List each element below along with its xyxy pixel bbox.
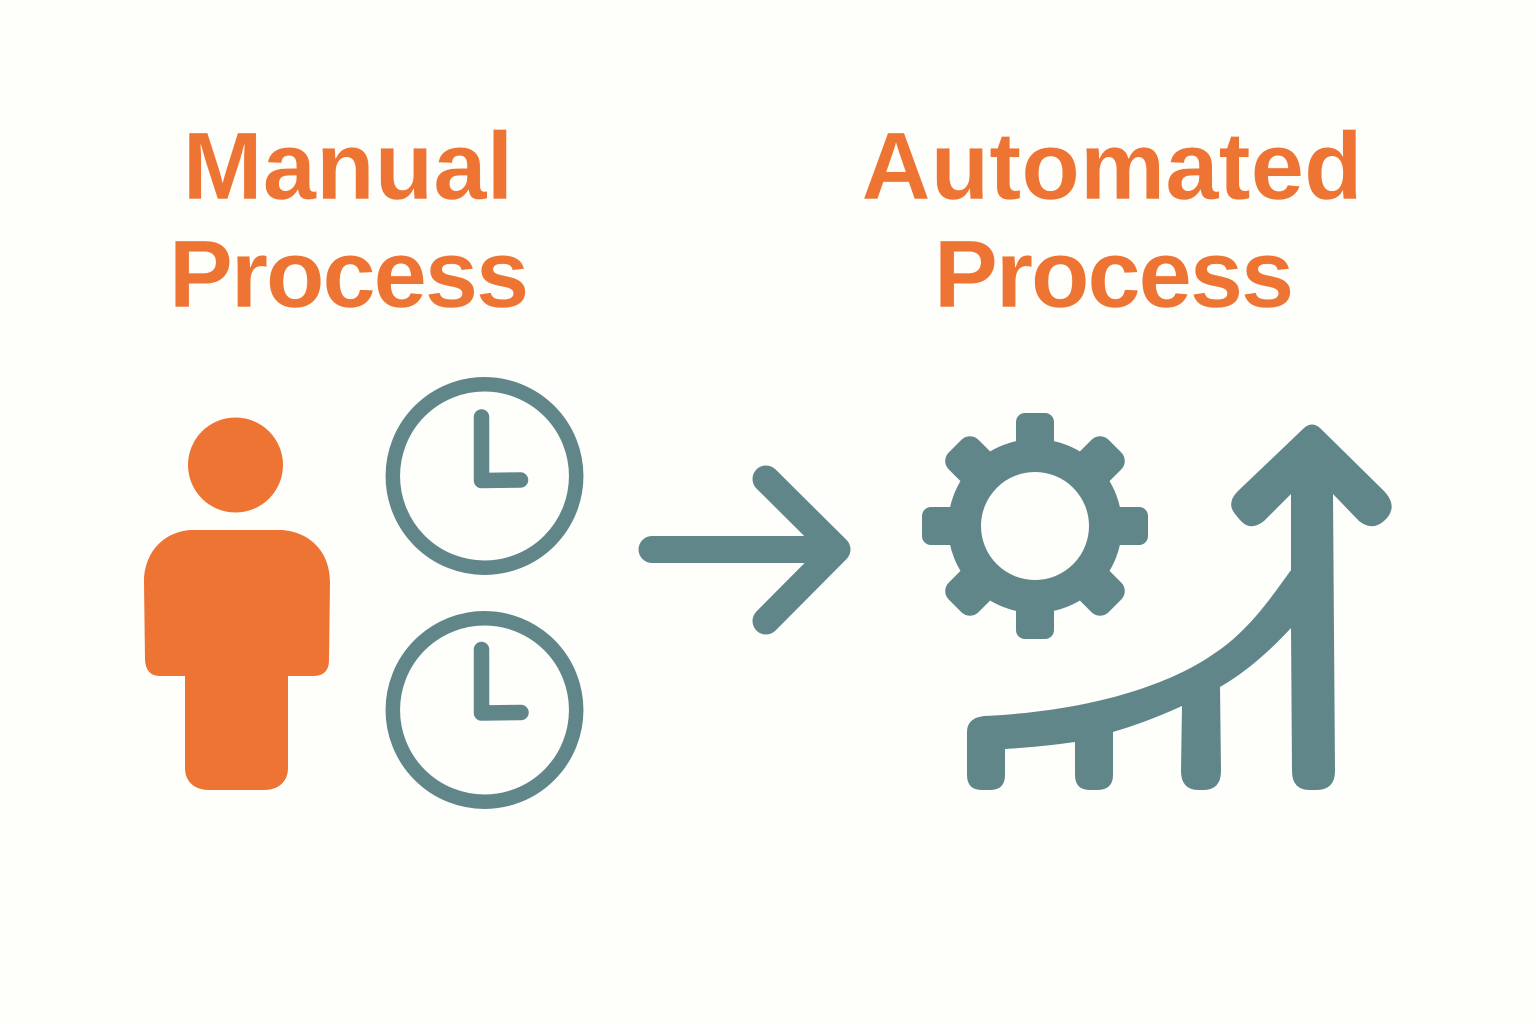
- icon: clock bottom: [393, 618, 576, 802]
- heading: Automated Process: Process: [934, 221, 1292, 328]
- heading: Manual Process: Manual: [183, 113, 513, 220]
- arrow: manual to automated: [652, 479, 837, 621]
- heading: Automated Process: Automated: [861, 113, 1363, 220]
- icon: person: [144, 418, 330, 790]
- icon: growth arrow with bars: [967, 424, 1392, 790]
- heading: Manual Process: Process: [169, 221, 527, 328]
- icon: clock top: [393, 384, 576, 568]
- heading: Automated Process: [861, 113, 1363, 328]
- heading: Manual Process: [169, 113, 527, 328]
- icon: gear: [922, 413, 1148, 639]
